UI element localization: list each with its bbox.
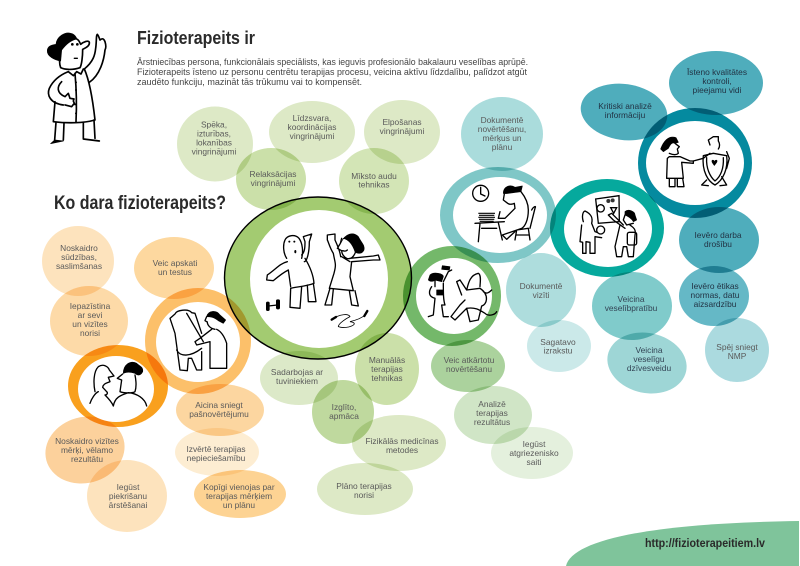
bubble: Analizē: [454, 386, 532, 444]
footer: website link: [566, 521, 799, 566]
bubble: Spēka: Spēka,: [201, 120, 227, 130]
bubble: Iegūst atgriezenisko: Iegūst: [523, 439, 546, 449]
bubble: Analizē: terapijas: [476, 408, 508, 418]
ring: doctor examining patient: [145, 288, 251, 394]
ring: teaching healthy habits: [550, 179, 664, 277]
bubble: Ievēro ētikas: [679, 266, 749, 326]
bubble: Izglīto: apmāca: [329, 411, 359, 421]
bubble: Spēj sniegt NMP: [705, 318, 769, 382]
bubble: Veicina veselīgu: [602, 325, 692, 401]
bubble: Dokumentē novērtēšanu: mērķus un: [482, 133, 522, 143]
bubble: Spēj sniegt NMP: Spēj sniegt: [716, 342, 758, 352]
bubble: Iepazīstina: un vizītes: [72, 319, 108, 329]
bubble: Relaksācijas: [236, 148, 306, 210]
bubble: Iepazīstina: ar sevi: [78, 310, 102, 320]
bubble: Spēka: izturības,: [197, 128, 231, 138]
ring: physiotherapist exercising with patient: [224, 197, 412, 359]
bubble: Kopīgi: Kopīgi vienojas par: [203, 482, 275, 492]
bubble: Īsteno: [669, 51, 763, 115]
bubble: Spēka: lokanības: [196, 138, 232, 148]
bubble: Manuālās: terapijas: [371, 364, 403, 374]
bubble: Iegūst piekrišanu: Iegūst: [117, 482, 140, 492]
bubble: Manuālās: tehnikas: [371, 373, 403, 383]
ring: documenting at desk: [440, 167, 556, 263]
bubble: Īsteno: Īsteno kvalitātes: [687, 67, 747, 77]
bubble: Sagatavo: Sagatavo: [540, 337, 576, 347]
bubble: Veicina veselīgu: Veicina: [635, 345, 663, 355]
bubble: Sadarbojas: Sadarbojas ar: [271, 367, 323, 377]
ring: follow-up with patient: [403, 246, 501, 346]
bubble: Plāno: norisi: [354, 490, 374, 500]
bubble: Izvērtē: nepieciešamību: [187, 453, 246, 463]
bubble: Veic apskati: un testus: [158, 267, 192, 277]
heading: Fizioterapeits ir: Fizioterapeits ir: [137, 28, 255, 48]
bubble: Veic atkārtotu: Veic atkārtotu: [444, 355, 495, 365]
bubble: Kritiski: informāciju: [605, 110, 646, 120]
bubble: Dokumentē novērtēšanu: novērtēšanu,: [478, 124, 526, 134]
bubble: Iepazīstina: [50, 286, 128, 356]
bubble: Noskaidro sūdzības: Noskaidro: [60, 243, 98, 253]
bubble: Sadarbojas: tuviniekiem: [276, 376, 318, 386]
bubble: Dokumentē novērtēšanu: plānu: [492, 142, 513, 152]
text block: definition: [137, 57, 528, 88]
bubble: Fizikālās: Fizikālās medicīnas: [365, 436, 439, 446]
bubble: Līdzsvara: [269, 101, 355, 163]
bubble: Elpošanas: vingrinājumi: [380, 126, 424, 136]
bubble: Ievēro ētikas: aizsardzību: [694, 299, 737, 309]
bubble: Elpošanas: Elpošanas: [382, 117, 422, 127]
text block: definition: Fizioterapeits īsteno uz personu centrētu terapijas procesu, veicina aktīvu līdzdalību, palīdzot atgūt: [137, 67, 527, 78]
bubble: Spēj sniegt NMP: NMP: [728, 351, 747, 361]
bubble: Veicina veselībpratību: Veicina: [617, 294, 645, 304]
bubble: Kritiski: [577, 78, 671, 146]
bubble: Aicina: pašnovērtējumu: [189, 409, 249, 419]
bubble: Iegūst atgriezenisko: atgriezenisko: [509, 448, 559, 458]
text block: definition: zaudēto funkciju, mazināt tās trūkumu vai to kompensēt.: [137, 77, 362, 88]
bubble: Mīksto audu: [339, 148, 409, 214]
bubble: Noskaidro vizītes: mērķi, vēlamo: [61, 445, 113, 455]
bubble: Kritiski: Kritiski analizē: [598, 101, 652, 111]
bubble: Iegūst atgriezenisko: [491, 427, 573, 479]
bubble: Dokumentē vizīti: [506, 253, 576, 327]
bubble: Izglīto: [312, 380, 374, 444]
bubble: Līdzsvara: koordinācijas: [288, 122, 336, 132]
bubble: Līdzsvara: Līdzsvara,: [293, 113, 331, 123]
footer: website link: http://fizioterapeitiem.lv: [645, 538, 766, 550]
bubble: Ievēro darba: Ievēro darba: [694, 230, 742, 240]
bubble: Veic atkārtotu: [431, 340, 505, 392]
bubble: Dokumentē vizīti: vizīti: [533, 290, 550, 300]
bubble: Ievēro ētikas: normas, datu: [691, 290, 740, 300]
bubble: Noskaidro vizītes: rezultātu: [71, 454, 103, 464]
bubble: Sagatavo: [527, 320, 591, 372]
icon: physiotherapist pointing up: [47, 33, 106, 144]
bubble: Plāno: Plāno terapijas: [336, 481, 392, 491]
bubble: Iegūst atgriezenisko: saiti: [527, 457, 542, 467]
bubble: Īsteno: kontroli,: [702, 76, 732, 86]
bubble: Mīksto audu: Mīksto audu: [351, 171, 397, 181]
bubble: Ievēro darba: [679, 207, 759, 273]
bubble: Veicina veselībpratību: veselībpratību: [605, 303, 658, 313]
bubble: Sadarbojas: [260, 351, 338, 405]
bubble: Veic apskati: [134, 237, 214, 299]
bubble: Veicina veselīgu: dzīvesveidu: [627, 363, 671, 373]
bubble: Noskaidro vizītes: [38, 408, 132, 492]
bubble: Līdzsvara: vingrinājumi: [290, 131, 334, 141]
bubble: Iepazīstina: norisi: [80, 328, 100, 338]
bubble: Sagatavo: izrakstu: [544, 346, 573, 356]
bubble: Aicina: [176, 384, 264, 436]
bubble: Spēka: vingrinājumi: [192, 146, 236, 156]
bubble: Kopīgi: [194, 470, 286, 518]
bubble: Izvērtē: [175, 428, 259, 476]
bubble: Veicina veselībpratību: [592, 272, 672, 340]
heading: Ko dara fizioterapeits?: Ko dara fizioterapeits?: [54, 193, 226, 214]
bubble: Noskaidro sūdzības: [42, 226, 114, 296]
bubble: Noskaidro sūdzības: saslimšanas: [56, 261, 102, 271]
bubble: Relaksācijas: Relaksācijas: [249, 169, 297, 179]
bubble: Kopīgi: un plānu: [223, 500, 255, 510]
bubble: Veic atkārtotu: novērtēšanu: [446, 364, 492, 374]
bubble: Manuālās: Manuālās: [369, 355, 405, 365]
bubble: Iegūst piekrišanu: ārstēšanai: [109, 500, 147, 510]
text block: definition: Ārstniecības persona, funkcionālais speciālists, kas ieguvis profesionālo bakalauru veselības aprūpē.: [137, 57, 528, 68]
bubble: Iegūst piekrišanu: piekrišanu: [109, 491, 147, 501]
bubble: Analizē: Analizē: [478, 399, 506, 409]
bubble: Mīksto audu: tehnikas: [358, 180, 390, 190]
bubble: Analizē: rezultātus: [474, 417, 510, 427]
bubble: Dokumentē novērtēšanu: Dokumentē: [481, 115, 524, 125]
bubble: Veicina veselīgu: veselīgu: [633, 354, 665, 364]
bubble: Aicina: Aicina sniegt: [195, 400, 243, 410]
bubble: Iegūst piekrišanu: [87, 460, 167, 532]
bubble: Īsteno: pieejamu vidi: [693, 85, 742, 95]
bubble: Dokumentē vizīti: Dokumentē: [520, 281, 563, 291]
bubble: Fizikālās: [352, 415, 446, 471]
bubble: Veic apskati: Veic apskati: [153, 258, 197, 268]
bubble: Iepazīstina: Iepazīstina: [70, 301, 111, 311]
bubble: Noskaidro vizītes: Noskaidro vizītes: [55, 436, 119, 446]
bubble: Ievēro ētikas: Ievēro ētikas: [691, 281, 739, 291]
bubble: Izglīto: Izglīto,: [332, 402, 356, 412]
bubble: Plāno: [317, 463, 413, 515]
bubble: Izvērtē: Izvērtē terapijas: [186, 444, 246, 454]
bubble: Kopīgi: terapijas mērķiem: [206, 491, 272, 501]
bubble: Dokumentē novērtēšanu: [461, 97, 543, 171]
bubble: Ievēro darba: drošību: [704, 239, 732, 249]
ring: safety and ethics handshake: [638, 108, 752, 218]
bubble: Noskaidro sūdzības: sūdzības,: [61, 252, 97, 262]
bubble: Fizikālās: metodes: [386, 445, 418, 455]
bubble: Manuālās: [355, 333, 419, 405]
ring: doctor talking with patient: [68, 345, 168, 427]
bubble: Elpošanas: [364, 100, 440, 164]
bubble: Relaksācijas: vingrinājumi: [251, 178, 295, 188]
bubble: Spēka: [177, 106, 253, 182]
